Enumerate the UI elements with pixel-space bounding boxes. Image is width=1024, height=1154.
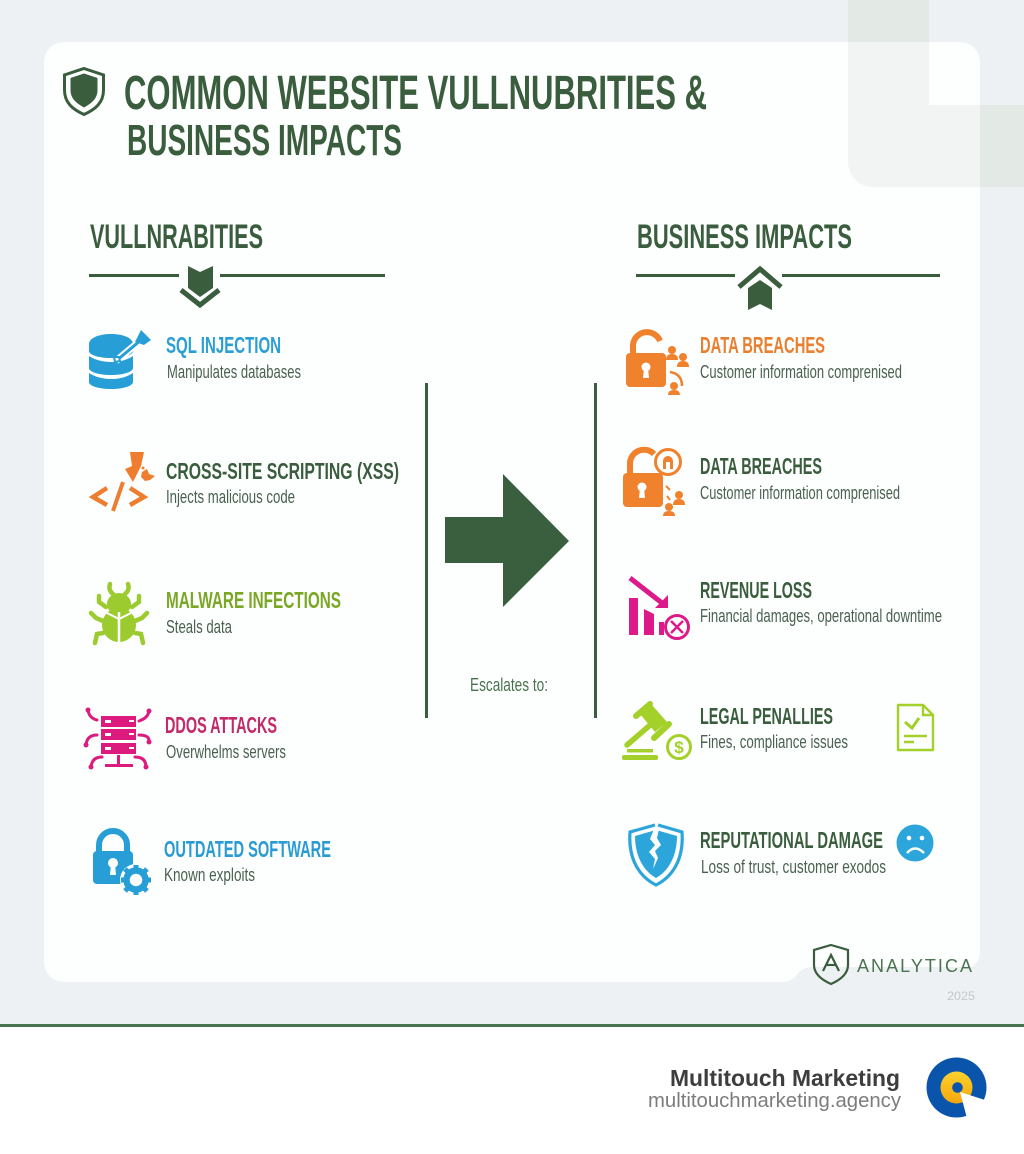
- icon: padlock with gear: [93, 831, 152, 896]
- label: reputational damage: REPUTATIONAL DAMAGE: [700, 827, 883, 853]
- brand url: multitouchmarketing.agency: [648, 1090, 901, 1112]
- description: Fines, compliance issues: [700, 732, 848, 752]
- icon: down chevron: [181, 266, 219, 305]
- description: Injects malicious code: [166, 487, 295, 507]
- divider right: [594, 383, 597, 718]
- description: Financial damages, operational downtime: [700, 606, 942, 626]
- heading: vulnerabilities: VULLNRABITIES: [90, 218, 263, 256]
- label: data breaches: DATA BREACHES: [700, 332, 825, 358]
- label: cross-site scripting: CROSS-SITE SCRIPTING (XSS): [166, 458, 399, 484]
- icon: server: [84, 708, 152, 770]
- icon: open lock with people: [626, 332, 689, 395]
- icon: database: [89, 330, 151, 389]
- item: data breaches green: [623, 450, 900, 516]
- footer band: [0, 1024, 1024, 1154]
- title block: [64, 67, 707, 165]
- panel: main card: [44, 42, 980, 982]
- label: revenue loss: REVENUE LOSS: [700, 577, 812, 603]
- description: Manipulates databases: [167, 362, 301, 382]
- label: malware infections: MALWARE INFECTIONS: [166, 587, 341, 613]
- item: outdated software: [93, 831, 331, 896]
- icon: open lock with badge: [623, 450, 685, 516]
- column header: vulnerabilities: [89, 218, 385, 305]
- description: Loss of trust, customer exodos: [701, 857, 886, 877]
- icon: up chevron: [739, 269, 781, 310]
- icon: analytica shield: [814, 945, 848, 984]
- item: ddos attacks: [84, 708, 286, 770]
- description: Known exploits: [164, 865, 255, 885]
- item: data breaches orange: [626, 332, 902, 395]
- item: revenue loss: [629, 577, 942, 638]
- label: outdated software: OUTDATED SOFTWARE: [164, 836, 331, 862]
- logo: analytica: [814, 945, 975, 1003]
- title line 2: BUSINESS IMPACTS: [127, 116, 402, 165]
- label: data breaches: DATA BREACHES: [700, 453, 822, 479]
- divider left: [425, 383, 428, 718]
- label: legal penalties: LEGAL PENALLIES: [700, 703, 833, 729]
- label: escalates to: Escalates to:: [470, 675, 548, 695]
- icon: document check: [898, 705, 933, 750]
- icon: code burst: [93, 452, 155, 511]
- column header: business impacts: [636, 218, 940, 310]
- item: cross-site scripting: [93, 452, 399, 511]
- year: 2025: [947, 989, 975, 1003]
- description: Customer information comprenised: [700, 362, 902, 382]
- icon: shield: [64, 68, 104, 114]
- description: Customer information comprenised: [700, 483, 900, 503]
- label: ddos attacks: DDOS ATTACKS: [165, 712, 277, 738]
- icon: gavel with dollar: $: [674, 738, 684, 757]
- item: malware infections: [91, 584, 341, 643]
- label: sql injection: SQL INJECTION: [166, 332, 281, 358]
- item: sql injection: [89, 330, 301, 389]
- heading: business impacts: BUSINESS IMPACTS: [637, 218, 852, 256]
- description: Steals data: [166, 617, 233, 637]
- item: reputational damage: [630, 824, 934, 885]
- brand name: Multitouch Marketing: [670, 1065, 900, 1091]
- icon: cracked shield: [630, 825, 682, 885]
- icon: bug: [91, 584, 147, 643]
- wordmark: ANALYTICA: [857, 956, 972, 976]
- icon: sad face: [896, 824, 934, 862]
- item: legal penalties: [622, 703, 933, 760]
- icon: falling bars: [629, 578, 688, 638]
- description: Overwhelms servers: [166, 742, 286, 762]
- arrow: escalation: [445, 474, 569, 607]
- logo: multitouch: [926, 1058, 986, 1122]
- title line 1: COMMON WEBSITE VULLNUBRITIES &: [124, 67, 707, 120]
- icon: gavel with dollar: [622, 704, 690, 760]
